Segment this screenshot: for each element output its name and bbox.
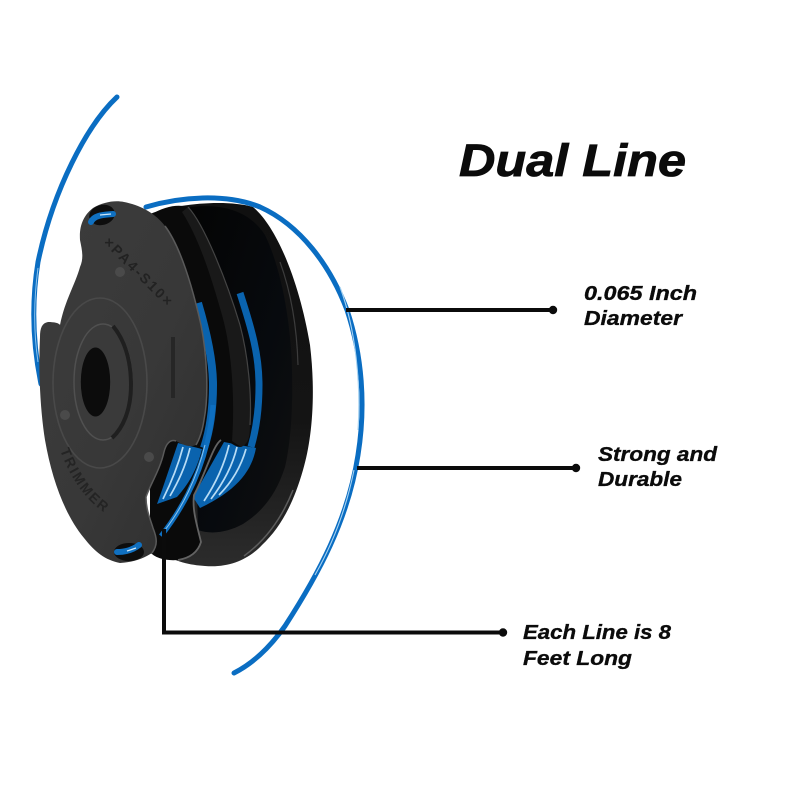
plate rim highlight [146, 226, 207, 553]
blue trimmer line: right strand [146, 198, 362, 673]
blue line leaving spool front [161, 405, 213, 536]
plate small bosses [60, 267, 154, 462]
embossed brand: TRIMMER [61, 446, 108, 512]
plate slot [171, 337, 175, 398]
blue line through front plate eyelet, top [87, 202, 117, 228]
label: strong and durable [598, 443, 718, 491]
embossed part number: ×PA4-S10× [101, 234, 176, 309]
spool: rear flange [150, 203, 313, 566]
rear flange inner dish [190, 206, 292, 532]
callout: each line is 8 feet long [164, 529, 507, 637]
spool: middle flange [150, 206, 251, 560]
label: each line is 8 feet long: Feet Long [523, 647, 633, 670]
label: each line is 8 feet long: Each Line is 8 [523, 621, 672, 644]
label: 0.065 inch diameter [584, 282, 697, 330]
spool: blue winding rear groove [193, 293, 259, 508]
label: 0.065 inch diameter: Diameter [584, 307, 683, 330]
label: strong and durable: Strong and [598, 443, 718, 466]
callout: 0.065 inch diameter [346, 306, 557, 314]
middle flange rim band [182, 207, 251, 447]
plate hub rings [53, 298, 147, 468]
label: strong and durable: Durable [598, 468, 682, 491]
label: each line is 8 feet long [523, 621, 672, 670]
title: Dual Line [459, 135, 686, 186]
blue line through front plate eyelet, bottom [114, 543, 144, 561]
callout: strong and durable [357, 464, 580, 472]
blue trimmer line: left strand [34, 97, 117, 384]
spool: blue winding front groove [157, 303, 213, 504]
label: 0.065 inch diameter: 0.065 Inch [584, 282, 697, 305]
spool: front plate [39, 201, 208, 563]
plate centre hole [81, 348, 110, 416]
